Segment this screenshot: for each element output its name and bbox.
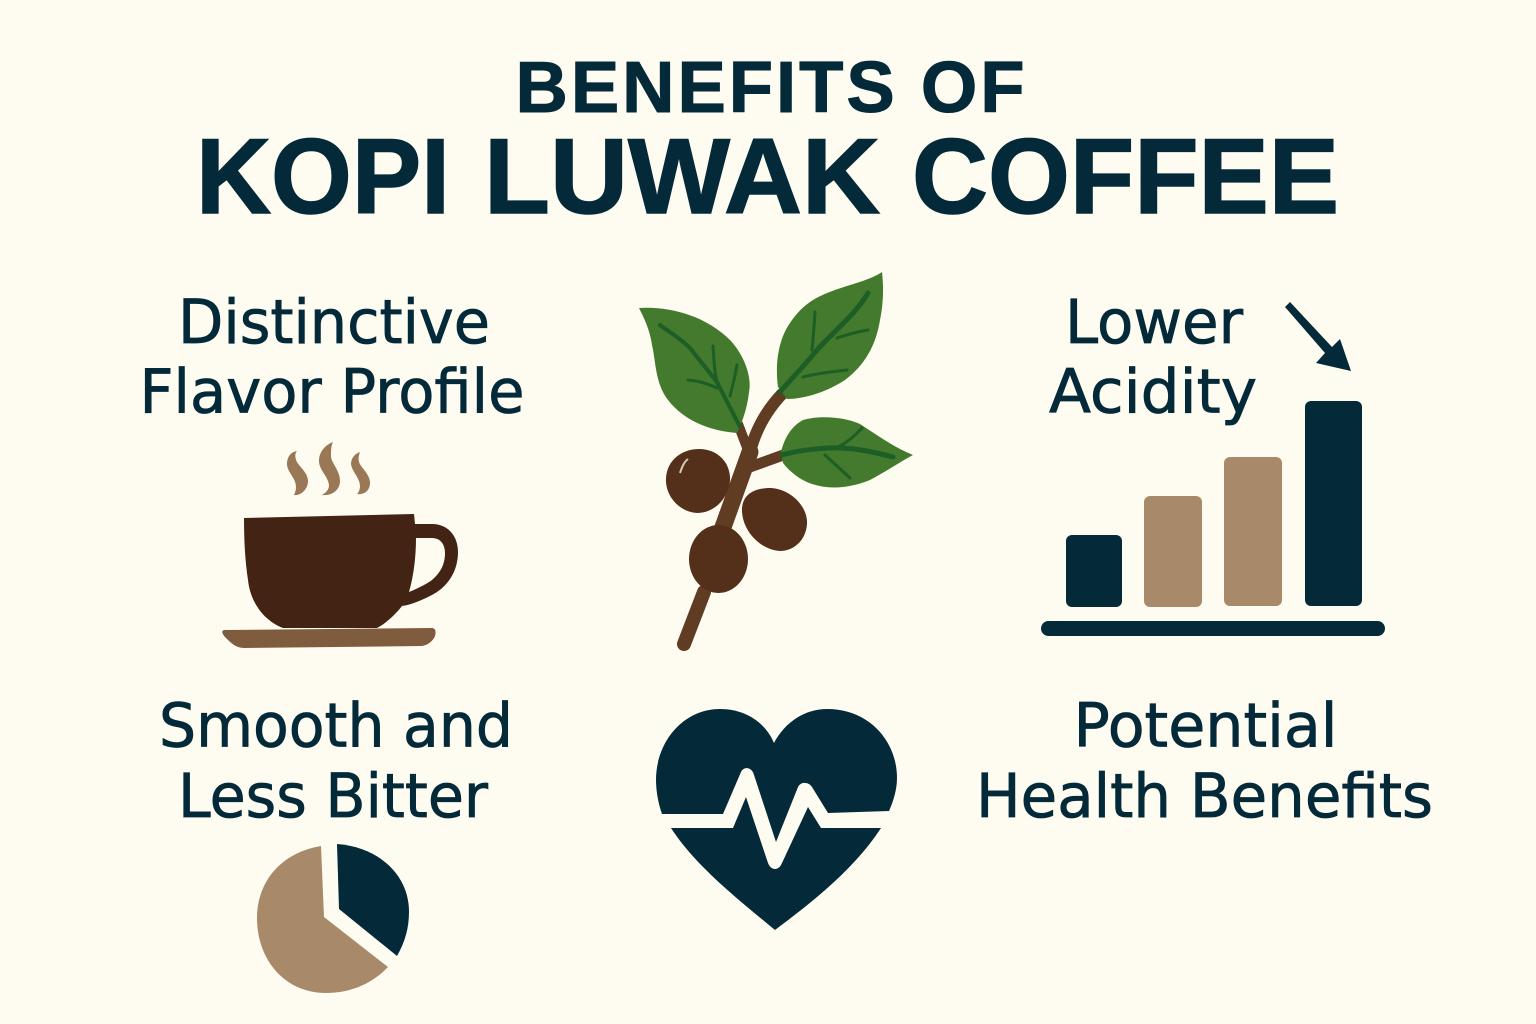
icon: coffee cup	[222, 442, 458, 648]
heading: lower acidity	[1049, 287, 1257, 428]
heading: lower acidity: Lower	[1065, 287, 1244, 358]
title line two: KOPI	[196, 116, 450, 236]
title line two: LUWAK	[484, 116, 880, 236]
icon: heart with pulse	[656, 709, 897, 930]
heading: potential health benefits	[976, 690, 1433, 832]
heading: potential health benefits: Health Benefits	[976, 761, 1433, 832]
heading: smooth and less bitter: Less Bitter	[178, 761, 489, 832]
heading: potential health benefits: Potential	[1074, 690, 1338, 762]
heading: distinctive flavor profile: Distinctive	[178, 287, 490, 358]
icon: coffee branch	[639, 272, 913, 644]
heading: smooth and less bitter	[159, 690, 513, 832]
heading: distinctive flavor profile: Flavor Profile	[140, 356, 524, 428]
heading: smooth and less bitter: Smooth and	[159, 690, 513, 762]
heading: distinctive flavor profile	[140, 287, 524, 428]
icon: pie chart	[257, 844, 409, 993]
title line two	[196, 116, 1339, 236]
icon: bar chart with arrow	[1041, 302, 1385, 636]
title line one: BENEFITS OF	[516, 47, 1024, 128]
heading: lower acidity: Acidity	[1049, 356, 1257, 428]
title line two: COFFEE	[912, 116, 1339, 236]
